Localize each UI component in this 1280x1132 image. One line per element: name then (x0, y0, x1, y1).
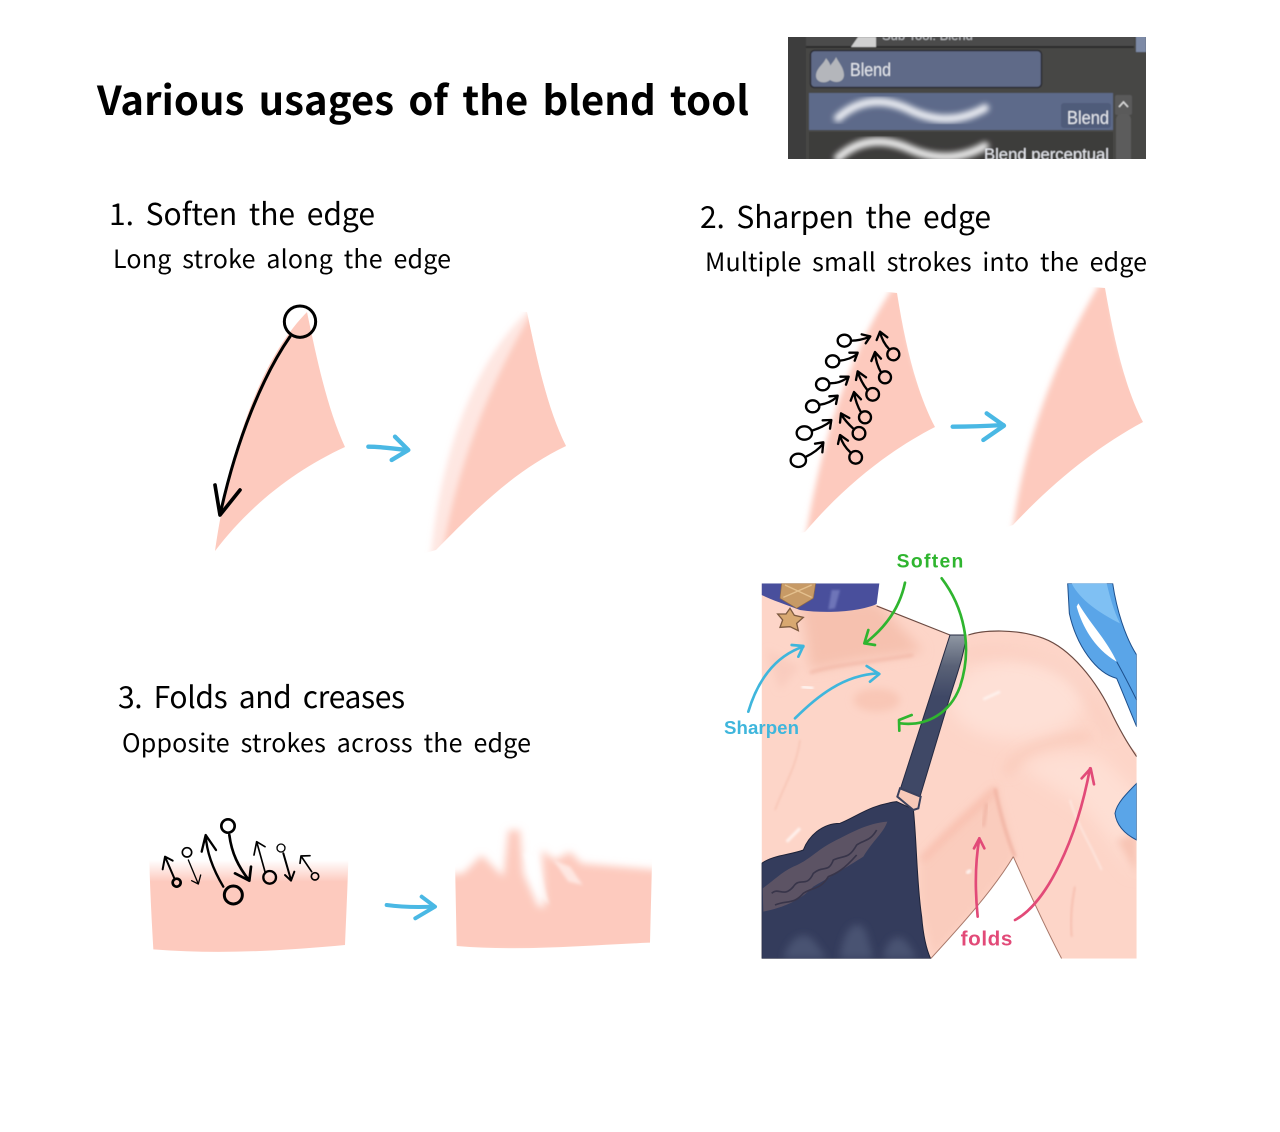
arrow 1 (368, 437, 408, 460)
strap buckle (897, 788, 921, 810)
shape after sharpening (1010, 288, 1143, 526)
icon: opposite strokes (163, 819, 319, 904)
icon: long stroke arrow with brush circle (215, 306, 316, 515)
annotation: folds: folds (961, 928, 1012, 951)
annotation: sharpen (724, 645, 879, 738)
icon: water drops (816, 57, 844, 82)
bra strap (900, 635, 966, 797)
annotation: sharpen: Sharpen (724, 717, 799, 738)
shape after softening (430, 312, 566, 552)
panel 3: folds and creases (118, 673, 660, 953)
annotation: soften (864, 551, 966, 731)
screenshot: blend sub tool panel (788, 37, 1146, 159)
subheading 1: Long stroke along the edge (113, 240, 451, 276)
title: Various usages of the blend tool (96, 69, 749, 127)
sub tool label: Sub Tool: Blend (882, 28, 973, 43)
subheading 3: Opposite strokes across the edge (122, 724, 531, 760)
heading 1: 1. Soften the edge (109, 190, 375, 234)
arrow 2 (953, 413, 1004, 440)
panel 2: sharpen the edge (701, 204, 1146, 532)
blend perceptual brush row: Blend perceptual (984, 145, 1109, 164)
shape before folds (149, 860, 348, 952)
sub tool label (850, 37, 973, 48)
choker gold stud (780, 583, 816, 608)
heading 2: 2. Sharpen the edge (700, 193, 991, 237)
arrow 3 (387, 897, 435, 918)
panel 1: soften the edge (112, 200, 566, 552)
icon: small strokes with brush circles (791, 332, 899, 467)
scroll bar (1115, 95, 1132, 164)
shape after folds (455, 826, 652, 948)
blend perceptual brush row (810, 132, 1112, 159)
shape before sharpening (804, 292, 935, 532)
annotation: soften: Soften (897, 551, 963, 572)
blend brush row (809, 93, 1113, 130)
subheading 2: Multiple small strokes into the edge (705, 243, 1147, 279)
annotation: folds (961, 768, 1094, 951)
lace trim (763, 822, 887, 912)
skin (762, 583, 1137, 959)
blend button: Blend (850, 60, 891, 80)
heading 3: 3. Folds and creases (118, 673, 405, 717)
blend brush row: Blend (1067, 108, 1109, 128)
panel 4: shoulder illustration example (724, 551, 1137, 959)
star charm (778, 608, 803, 631)
choker (762, 583, 879, 612)
skin outline (877, 606, 1137, 757)
dress (762, 802, 931, 959)
hair (1068, 583, 1137, 840)
shape before softening (215, 312, 345, 551)
blend button (810, 50, 1042, 88)
